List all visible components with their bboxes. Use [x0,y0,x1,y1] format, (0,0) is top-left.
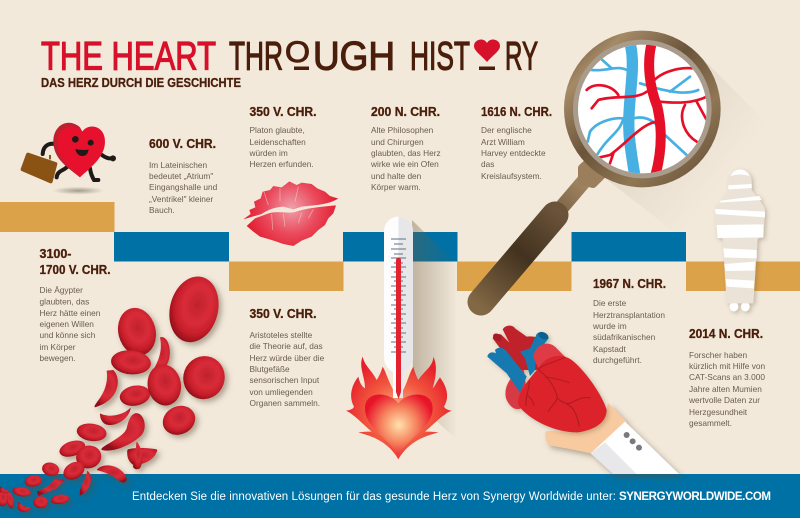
magnifier long shadow [587,54,800,330]
panel: 350 v. Chr. Platon [248,105,316,169]
body text: die Theorie auf, das [250,341,323,351]
body text: wertvolle Daten zur [688,395,760,405]
body text: Körper warm. [371,182,421,192]
body text: bewegen. [40,353,75,363]
body text: südafrikanischen [593,332,656,342]
body text: sensorischen Input [250,375,320,385]
body text: Forscher haben [689,350,747,360]
body text: bedeutet „Atrium" [149,171,213,181]
body text: Die erste [593,298,627,308]
heading: 200 N. CHR. [371,105,440,119]
magnifier lens [564,31,721,187]
icon: thermometer [384,215,414,400]
body text: Kreislaufsystem. [481,171,542,181]
thermometer long shadow [412,220,458,440]
body text: Aristoteles stellte [250,330,313,340]
body text: von umliegenden [250,387,313,397]
title: RY [505,34,538,78]
subtitle: DAS HERZ DURCH DIE GESCHICHTE [41,76,241,90]
title: THE HEART [41,34,216,78]
title [41,34,538,78]
footer text: SYNERGYWORLDWIDE.COM [619,491,771,503]
body text: wurde im [592,321,627,331]
title: UGH [313,34,395,78]
hand and sleeve [545,403,679,474]
title: O [285,36,310,69]
body text: Blutgefäße [250,364,290,374]
heading: 1967 N. CHR. [593,277,666,291]
icon: lipstick kiss [243,181,338,246]
body text: würden im [248,148,288,158]
heading: 350 V. CHR. [250,307,316,321]
heart organ [487,326,607,432]
body text: „Ventrikel" kleiner [149,194,214,204]
body text: Kapstadt [593,344,626,354]
icon: anatomical heart in hand [487,326,679,474]
icon: mummy [715,169,765,311]
body text: eigenen Willen [40,319,94,329]
body text: Eingangshalle und [149,182,218,192]
title: HIST [410,34,470,78]
panel: 1967 n. Chr. [592,277,666,365]
panel: 1616 n. Chr. [481,105,552,181]
body text: Alte Philosophen [371,125,434,135]
body text: im Körper [40,342,76,352]
icon: running heart character [23,123,116,195]
magnifier handle [481,158,605,302]
body text: kürzlich mit Hilfe von [689,361,765,371]
body text: Bauch. [149,205,175,215]
icon: red blood cells [0,271,231,512]
body text: CAT-Scans an 3.000 [689,372,765,382]
heading: 600 V. CHR. [149,137,216,151]
body text: Platon glaubte, [250,125,305,135]
body text: und Chirurgen [371,137,424,147]
panel: 200 n. Chr. [370,105,441,192]
body text: Der englische [481,125,532,135]
icon: magnifying glass [481,31,721,302]
body text: gesammelt. [689,418,732,428]
body text: Die Ägypter [40,285,83,295]
panel: 350 v. Chr. Aristoteles [250,307,325,408]
body text: Arzt William [481,137,525,147]
heading: 1700 V. CHR. [40,263,110,277]
title: THR [229,34,283,78]
heading: 3100- [40,247,71,261]
body text: und könne sich [40,330,96,340]
body text: Im Lateinischen [149,160,207,170]
panel: 600 v. Chr. [149,137,218,215]
body text: und halte den [371,171,422,181]
body text: Harvey entdeckte [481,148,546,158]
body text: Herzen erfunden. [250,159,314,169]
body text: Herztransplantation [593,310,665,320]
body text: Organen sammeln. [250,398,320,408]
heading: 1616 N. CHR. [481,105,552,119]
body text: durchgeführt. [593,355,642,365]
heading: 2014 N. CHR. [689,327,763,341]
body text: glaubten, das [40,296,89,306]
body text: Herz würde über die [250,353,325,363]
body text: Herz hätte einen [40,308,101,318]
body text: wirke wie ein Ofen [370,159,439,169]
footer text: Entdecken Sie die innovativen Lösungen für das gesunde Herz von Synergy Worldwide unter: [132,491,616,503]
footer bar [0,474,800,518]
body text: Leidenschaften [250,137,306,147]
body text: das [481,159,494,169]
panel: 2014 n. Chr. [688,327,765,428]
icon: flaming heart [346,357,452,459]
body text: Herzgesundheit [689,407,748,417]
heading: 350 V. CHR. [250,105,316,119]
panel: 3100-1700 v. Chr. [40,247,110,363]
body text: glaubten, das Herz [371,148,441,158]
body text: Jahre alten Mumien [689,384,762,394]
timeline band [0,202,800,291]
